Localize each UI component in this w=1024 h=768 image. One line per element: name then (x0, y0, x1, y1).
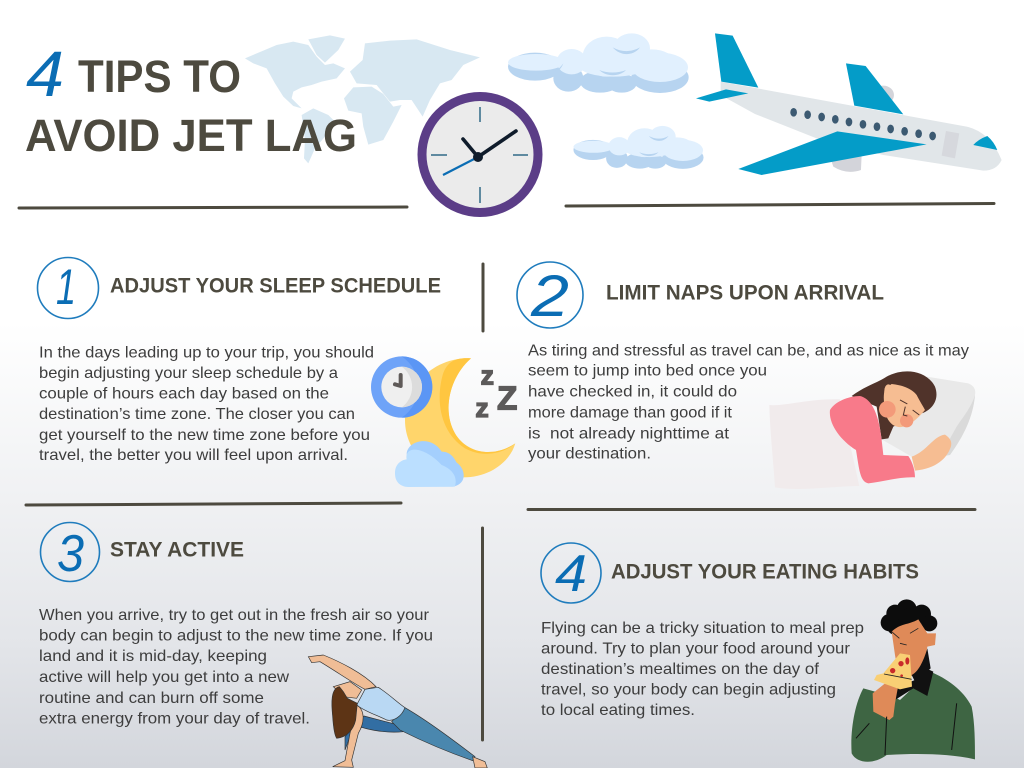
body text 1 (39, 344, 374, 464)
icon: small cloud (573, 126, 704, 169)
heading 1: ADJUST YOUR SLEEP SCHEDULE (110, 274, 441, 298)
panel: tip 3 (39, 522, 487, 768)
heading 3: STAY ACTIVE (110, 538, 244, 562)
illustration: sleeping woman (769, 371, 975, 489)
number badge 4: 4 (555, 545, 587, 603)
illustration: man eating pizza (851, 599, 975, 762)
number badge 3: 3 (57, 525, 84, 583)
title line 1: TIPS TO (78, 51, 241, 102)
body text 1: In the days leading up to your trip, you should (39, 344, 374, 362)
body text 3: active will help you get into a new (39, 669, 290, 686)
body text 1: get yourself to the new time zone before you (39, 427, 370, 444)
body text 3: extra energy from your day of travel. (39, 710, 310, 728)
icon: airplane (696, 33, 1002, 175)
body text 4: to local eating times. (541, 702, 695, 719)
body text 3 (39, 607, 433, 728)
body text 4: travel, so your body can begin adjusting (541, 682, 836, 698)
vertical divider top (482, 264, 484, 331)
body text 1: destination’s time zone. The closer you can (39, 406, 355, 423)
body text 1: travel, the better you will feel upon arrival. (39, 447, 348, 464)
icon: moon, clock and cloud: Z (497, 380, 517, 417)
icon: large cloud (508, 33, 689, 93)
panel: tip 1 (38, 258, 517, 487)
body text 2: seem to jump into bed once you (528, 362, 767, 380)
body text 3: land and it is mid-day, keeping (39, 648, 267, 665)
section divider left (26, 503, 401, 505)
illustration: yoga woman (308, 655, 487, 768)
body text 3: When you arrive, try to get out in the fresh air so your (39, 607, 429, 624)
body text 1: couple of hours each day based on the (39, 386, 329, 402)
body text 1: begin adjusting your sleep schedule by a (39, 365, 338, 382)
body text 4: around. Try to plan your food around your (541, 640, 850, 658)
icon: moon, clock and cloud: z (481, 360, 494, 390)
title line 2: AVOID JET LAG (25, 110, 357, 161)
body text 2: your destination. (528, 446, 651, 462)
world map (245, 35, 480, 163)
numeral 4: 4 (26, 38, 64, 110)
body text 4: destination’s mealtimes on the day of (541, 661, 820, 678)
number badge 2 (517, 262, 583, 329)
section divider right (528, 508, 975, 511)
icon: moon, clock and cloud: z (475, 393, 489, 423)
body text 2: is not already nighttime at (528, 426, 730, 442)
number badge 3 (40, 522, 100, 583)
header divider right (566, 204, 994, 206)
body text 3: routine and can burn off some (39, 690, 264, 707)
title (25, 38, 357, 161)
heading 2: LIMIT NAPS UPON ARRIVAL (606, 282, 884, 304)
icon: moon, clock and cloud (371, 356, 517, 487)
body text 2: As tiring and stressful as travel can be, and as nice as it may (528, 342, 969, 360)
body text 2: have checked in, it could do (528, 384, 737, 400)
body text 4 (541, 620, 864, 719)
heading 4: ADJUST YOUR EATING HABITS (611, 560, 919, 584)
body text 2: more damage than good if it (528, 404, 733, 422)
header divider left (19, 207, 407, 208)
icon: clock (422, 96, 538, 212)
panel: tip 2 (517, 262, 975, 489)
number badge 2: 2 (530, 264, 569, 329)
body text 4: Flying can be a tricky situation to meal prep (541, 620, 864, 637)
body text 3: body can begin to adjust to the new time zone. If you (39, 628, 433, 644)
vertical divider bottom (481, 528, 484, 740)
number badge 4 (541, 543, 601, 603)
number badge 1 (38, 258, 98, 318)
panel: tip 4 (541, 543, 975, 762)
body text 2 (528, 342, 969, 462)
number badge 1: 1 (56, 259, 76, 315)
